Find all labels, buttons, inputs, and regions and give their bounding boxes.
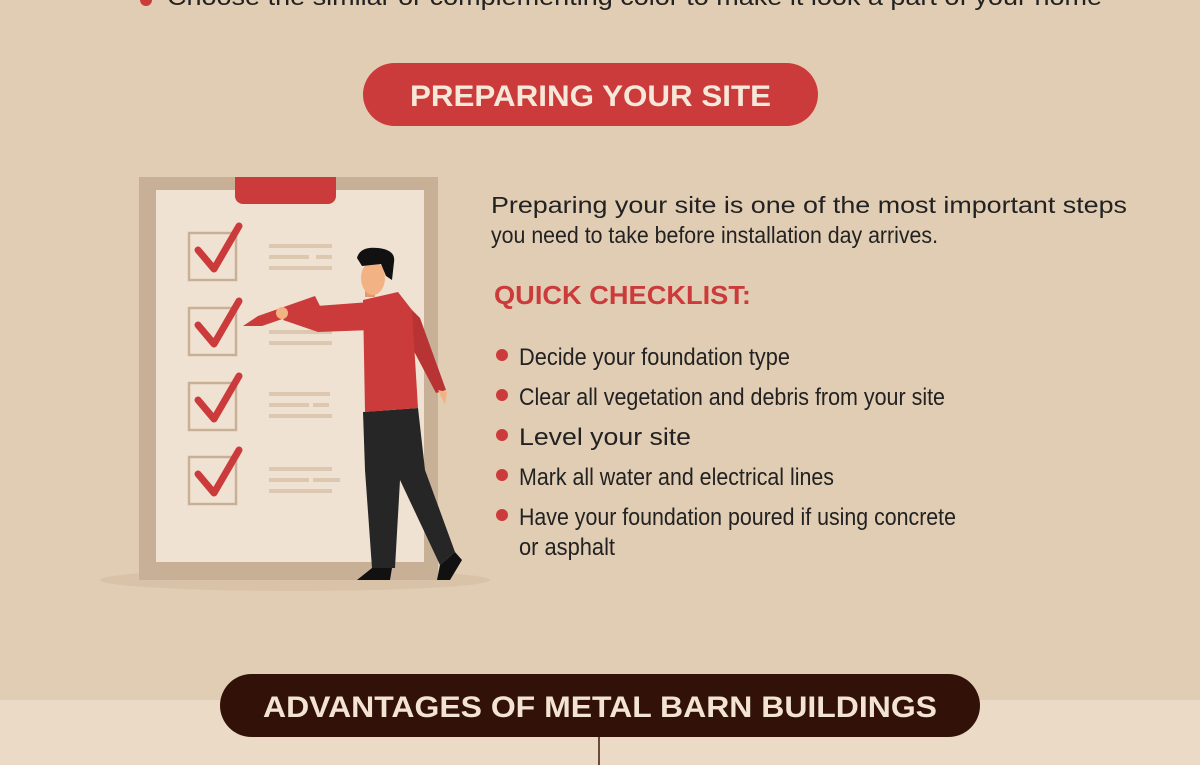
illustration: clipboard with person bbox=[100, 177, 490, 591]
checklist bullets: Level your site bbox=[519, 424, 691, 451]
heading pill: advantages: ADVANTAGES OF METAL BARN BUILDINGS bbox=[263, 691, 937, 724]
checklist bullets: Clear all vegetation and debris from your site bbox=[519, 384, 945, 411]
checklist bullets: Mark all water and electrical lines bbox=[519, 464, 834, 491]
heading pill: preparing your site: PREPARING YOUR SITE bbox=[410, 80, 771, 113]
checklist bullets bbox=[496, 344, 956, 561]
checklist bullets: Have your foundation poured if using concrete bbox=[519, 504, 956, 531]
person bbox=[400, 298, 446, 393]
intro text: Preparing your site is one of the most important steps bbox=[491, 192, 1127, 218]
connector line bbox=[598, 737, 600, 765]
intro text: you need to take before installation day arrives. bbox=[491, 222, 938, 248]
checklist bullets: or asphalt bbox=[519, 534, 615, 561]
intro text bbox=[491, 192, 1127, 248]
heading: quick checklist: QUICK CHECKLIST: bbox=[494, 280, 751, 310]
heading pill: advantages bbox=[220, 674, 980, 737]
checklist bullets: Decide your foundation type bbox=[519, 344, 790, 371]
heading pill: preparing your site bbox=[363, 63, 818, 126]
